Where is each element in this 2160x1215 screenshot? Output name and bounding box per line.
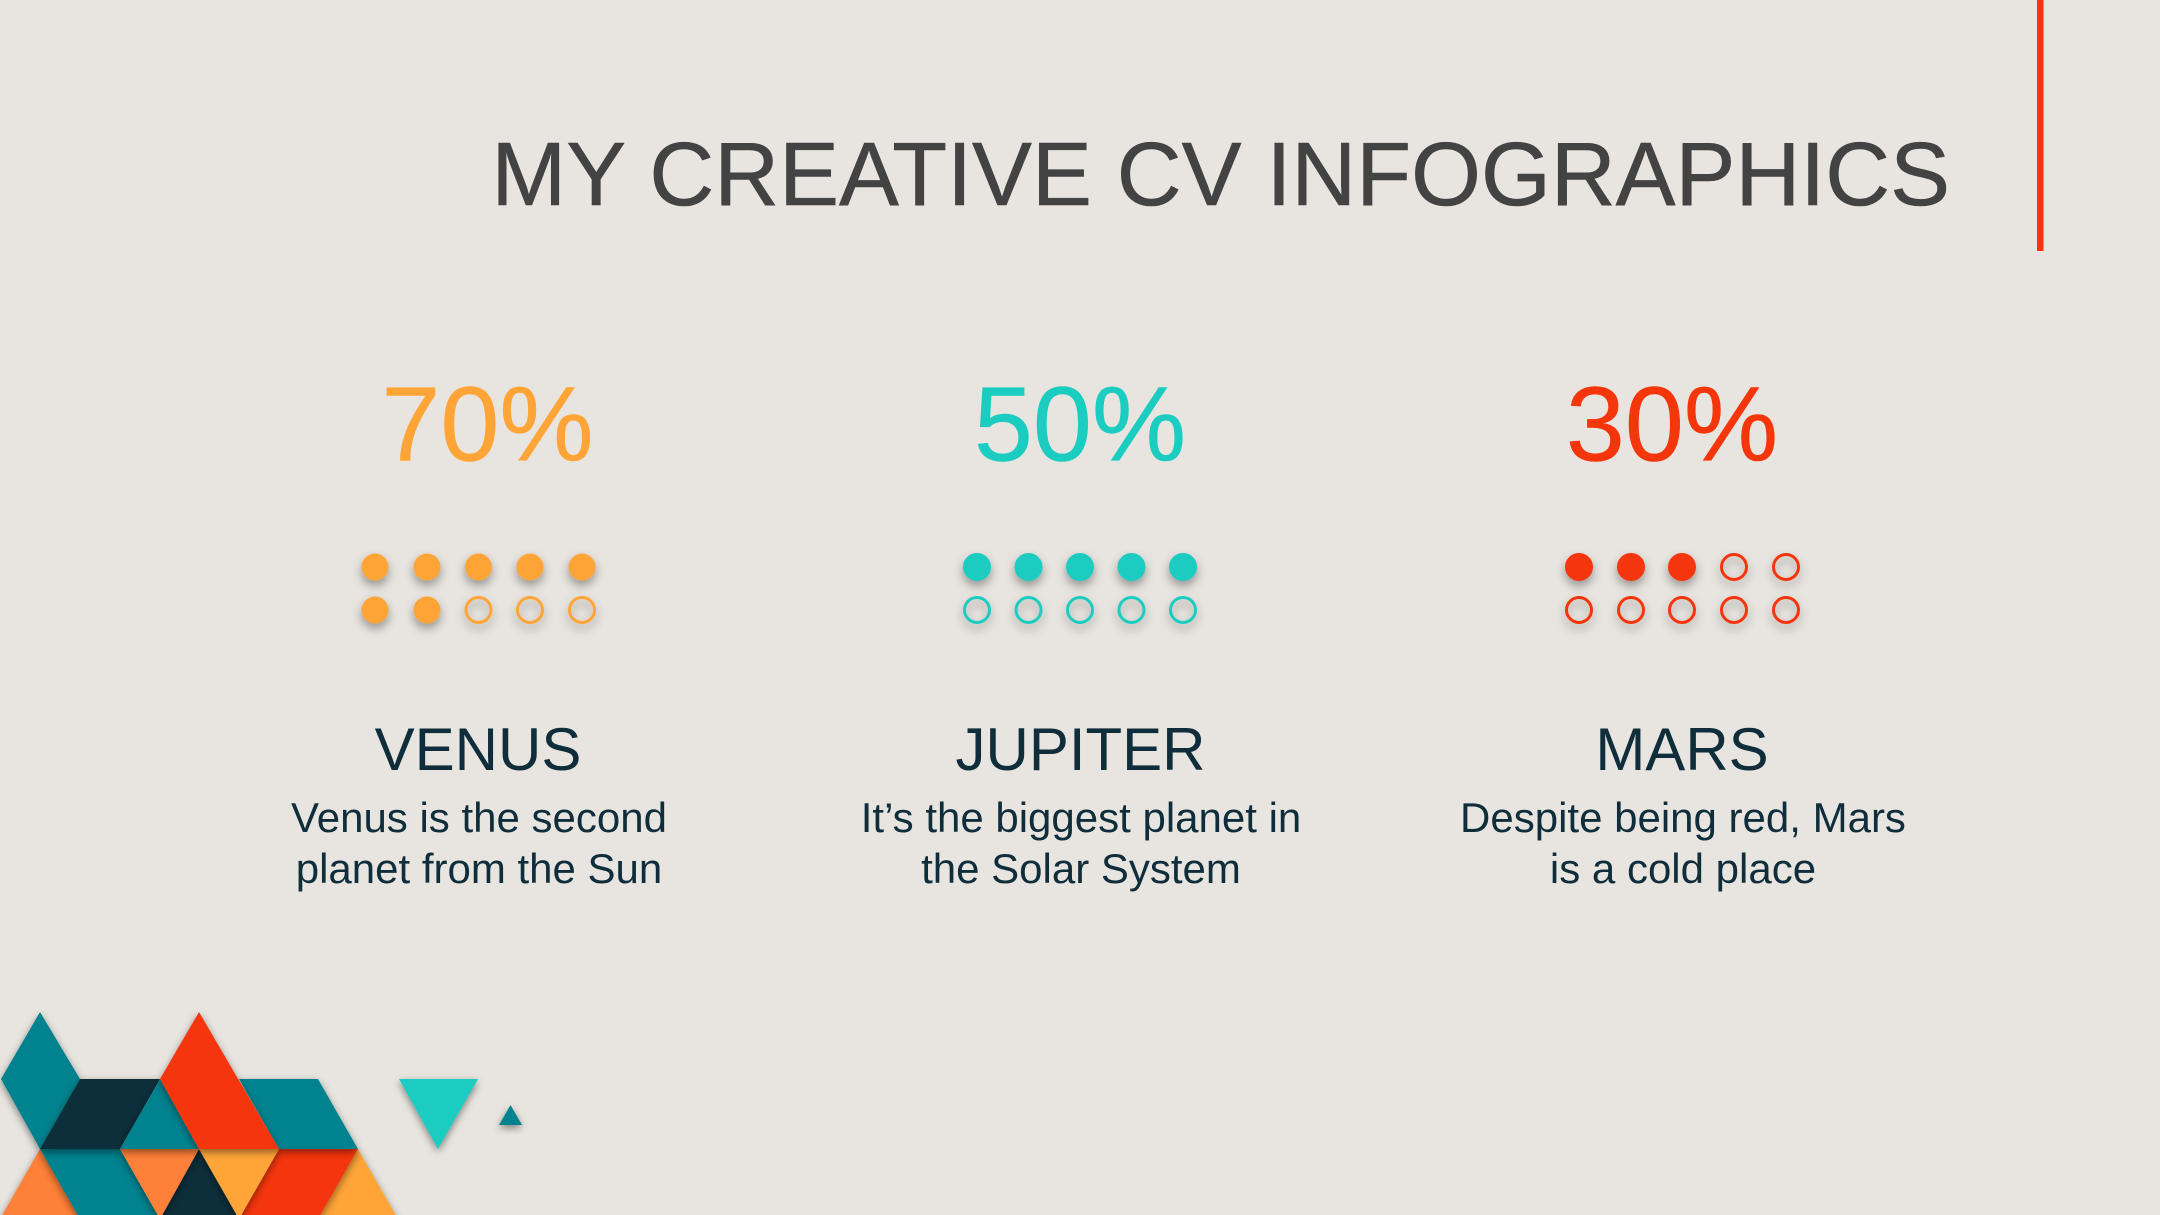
dot rating: 7 of 10 [363,555,594,622]
heading: Venus: VENUS [375,716,581,783]
percentage: 50%: 50% [974,366,1186,484]
icon: small teal triangle [499,1105,522,1125]
title: MY CREATIVE CV INFOGRAPHICS [491,125,1950,225]
icon: cyan inverted triangle [399,1079,478,1149]
description: Venus: Venus is the second [291,794,667,841]
description: Jupiter: the Solar System [921,845,1241,892]
percentage: 70%: 70% [381,366,594,484]
dot rating: 3 of 10 [1566,554,1798,622]
panel: Jupiter [861,366,1301,892]
heading: Jupiter: JUPITER [955,716,1206,783]
description: Jupiter: It’s the biggest planet in [861,794,1301,841]
description: Mars: is a cold place [1550,845,1816,892]
heading: Mars: MARS [1595,716,1769,783]
decoration: geometric triangle mosaic [0,1012,398,1215]
accent line [2037,0,2044,251]
description: Mars: Despite being red, Mars [1460,794,1906,841]
percentage: 30%: 30% [1566,366,1778,484]
panel: Venus [291,366,667,892]
dot rating: 5 of 10 [964,554,1196,622]
description: Venus: planet from the Sun [296,845,662,892]
panel: Mars [1460,366,1906,892]
